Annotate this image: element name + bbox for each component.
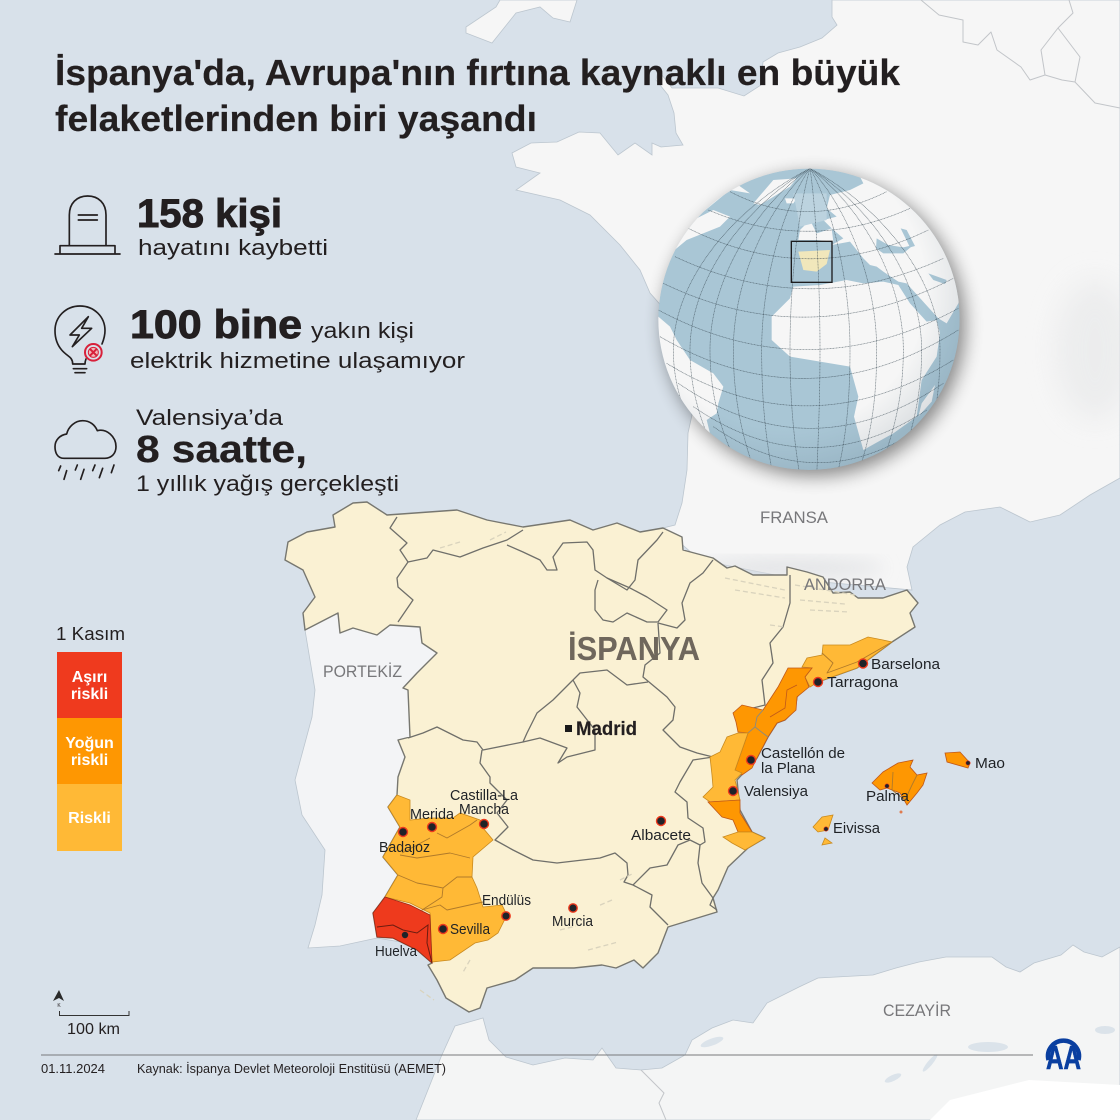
city labels: Albacete (631, 828, 691, 844)
north arrow and scale bar: K (57, 1003, 61, 1009)
city labels: Merida (410, 807, 455, 823)
globe locator (643, 168, 977, 490)
city labels (375, 657, 1005, 960)
icon: rain cloud (55, 421, 116, 479)
city labels: Valensiya (744, 784, 809, 800)
risk zones Extremadura and Andalusia (383, 795, 507, 962)
north arrow and scale bar (53, 990, 129, 1038)
stat: power outage: yakın kişi (311, 318, 414, 343)
city labels: Mao (975, 756, 1005, 772)
title: felaketlerinden biri yaşandı (55, 98, 537, 139)
stat: rainfall: 1 yıllık yağış gerçekleşti (136, 471, 399, 496)
legend: 1 Kasım (56, 624, 125, 644)
legend: extreme risk: Aşırı (72, 669, 107, 686)
title (55, 52, 901, 139)
country labels: İSPANYA (568, 630, 700, 667)
stat: power outage: elektrik hizmetine ulaşamıyor (130, 348, 465, 373)
stat: deaths: 158 kişi (137, 192, 282, 236)
city markers (398, 659, 970, 938)
city labels: Castilla-La (450, 788, 519, 804)
city labels: la Plana (761, 761, 816, 777)
footer: 01.11.2024 (41, 1062, 105, 1076)
stat: rainfall: Valensiya’da (136, 405, 284, 430)
city labels: Huelva (375, 944, 418, 960)
legend: risk: Riskli (68, 810, 111, 827)
capital: Madrid: Madrid (576, 719, 637, 740)
land: France and central Europe (512, 0, 1120, 590)
city labels: Tarragona (827, 675, 899, 691)
Black Sea, Caspian, Gulf (876, 238, 913, 253)
stat: power outage: 100 bine (130, 303, 302, 347)
footer (41, 1055, 1033, 1076)
Spanish regional borders (390, 517, 790, 925)
stat: rainfall: 8 saatte, (136, 429, 307, 471)
legend: extreme risk (57, 652, 122, 718)
title: İspanya'da, Avrupa'nın fırtına kaynaklı en büyük (55, 52, 901, 93)
icon: gravestone (55, 196, 120, 254)
city labels: Badajoz (379, 840, 430, 856)
land: Cornwall, England (466, 0, 577, 43)
legend (56, 624, 125, 851)
country labels (323, 508, 951, 1020)
logo: Anadolu Agency: AA (1046, 1039, 1081, 1076)
North America (676, 186, 750, 249)
city labels: Endülüs (482, 893, 531, 909)
city labels: Castellón de (761, 746, 845, 762)
legend: intense risk: riskli (71, 752, 108, 769)
stat: rainfall (55, 405, 399, 496)
north arrow and scale bar: 100 km (67, 1021, 120, 1038)
stat: deaths (55, 192, 328, 260)
stat: power outage (55, 303, 465, 373)
legend: intense risk (57, 718, 122, 784)
land: North Africa (416, 945, 1120, 1120)
South America (658, 316, 724, 433)
country labels: ANDORRA (804, 575, 887, 594)
Eurasia (824, 178, 959, 324)
city labels: Eivissa (833, 821, 881, 837)
stat: deaths: hayatını kaybetti (138, 235, 328, 260)
Africa (772, 280, 940, 450)
legend: extreme risk: riskli (71, 686, 108, 703)
extreme risk zone Huelva (373, 897, 432, 963)
mountain shading on Spain (420, 532, 855, 1000)
city labels: Mancha (459, 802, 510, 818)
land: Portugal (295, 600, 450, 950)
Madagascar (918, 385, 935, 417)
footer: Kaynak: İspanya Devlet Meteoroloji Enstitüsü (AEMET) (137, 1062, 446, 1076)
city labels: Sevilla (450, 922, 491, 938)
country labels: PORTEKİZ (323, 662, 402, 681)
icon: light bulb with red cross (55, 306, 105, 373)
legend: intense risk: Yoğun (65, 735, 114, 752)
city labels: Murcia (552, 914, 594, 930)
city labels: Barselona (871, 657, 941, 673)
country labels: CEZAYİR (883, 1001, 951, 1020)
legend: risk (57, 784, 122, 851)
country labels: FRANSA (760, 508, 829, 527)
risk zones east coast (703, 637, 970, 850)
land: Spain (285, 502, 918, 1012)
city labels: Palma (866, 789, 910, 805)
